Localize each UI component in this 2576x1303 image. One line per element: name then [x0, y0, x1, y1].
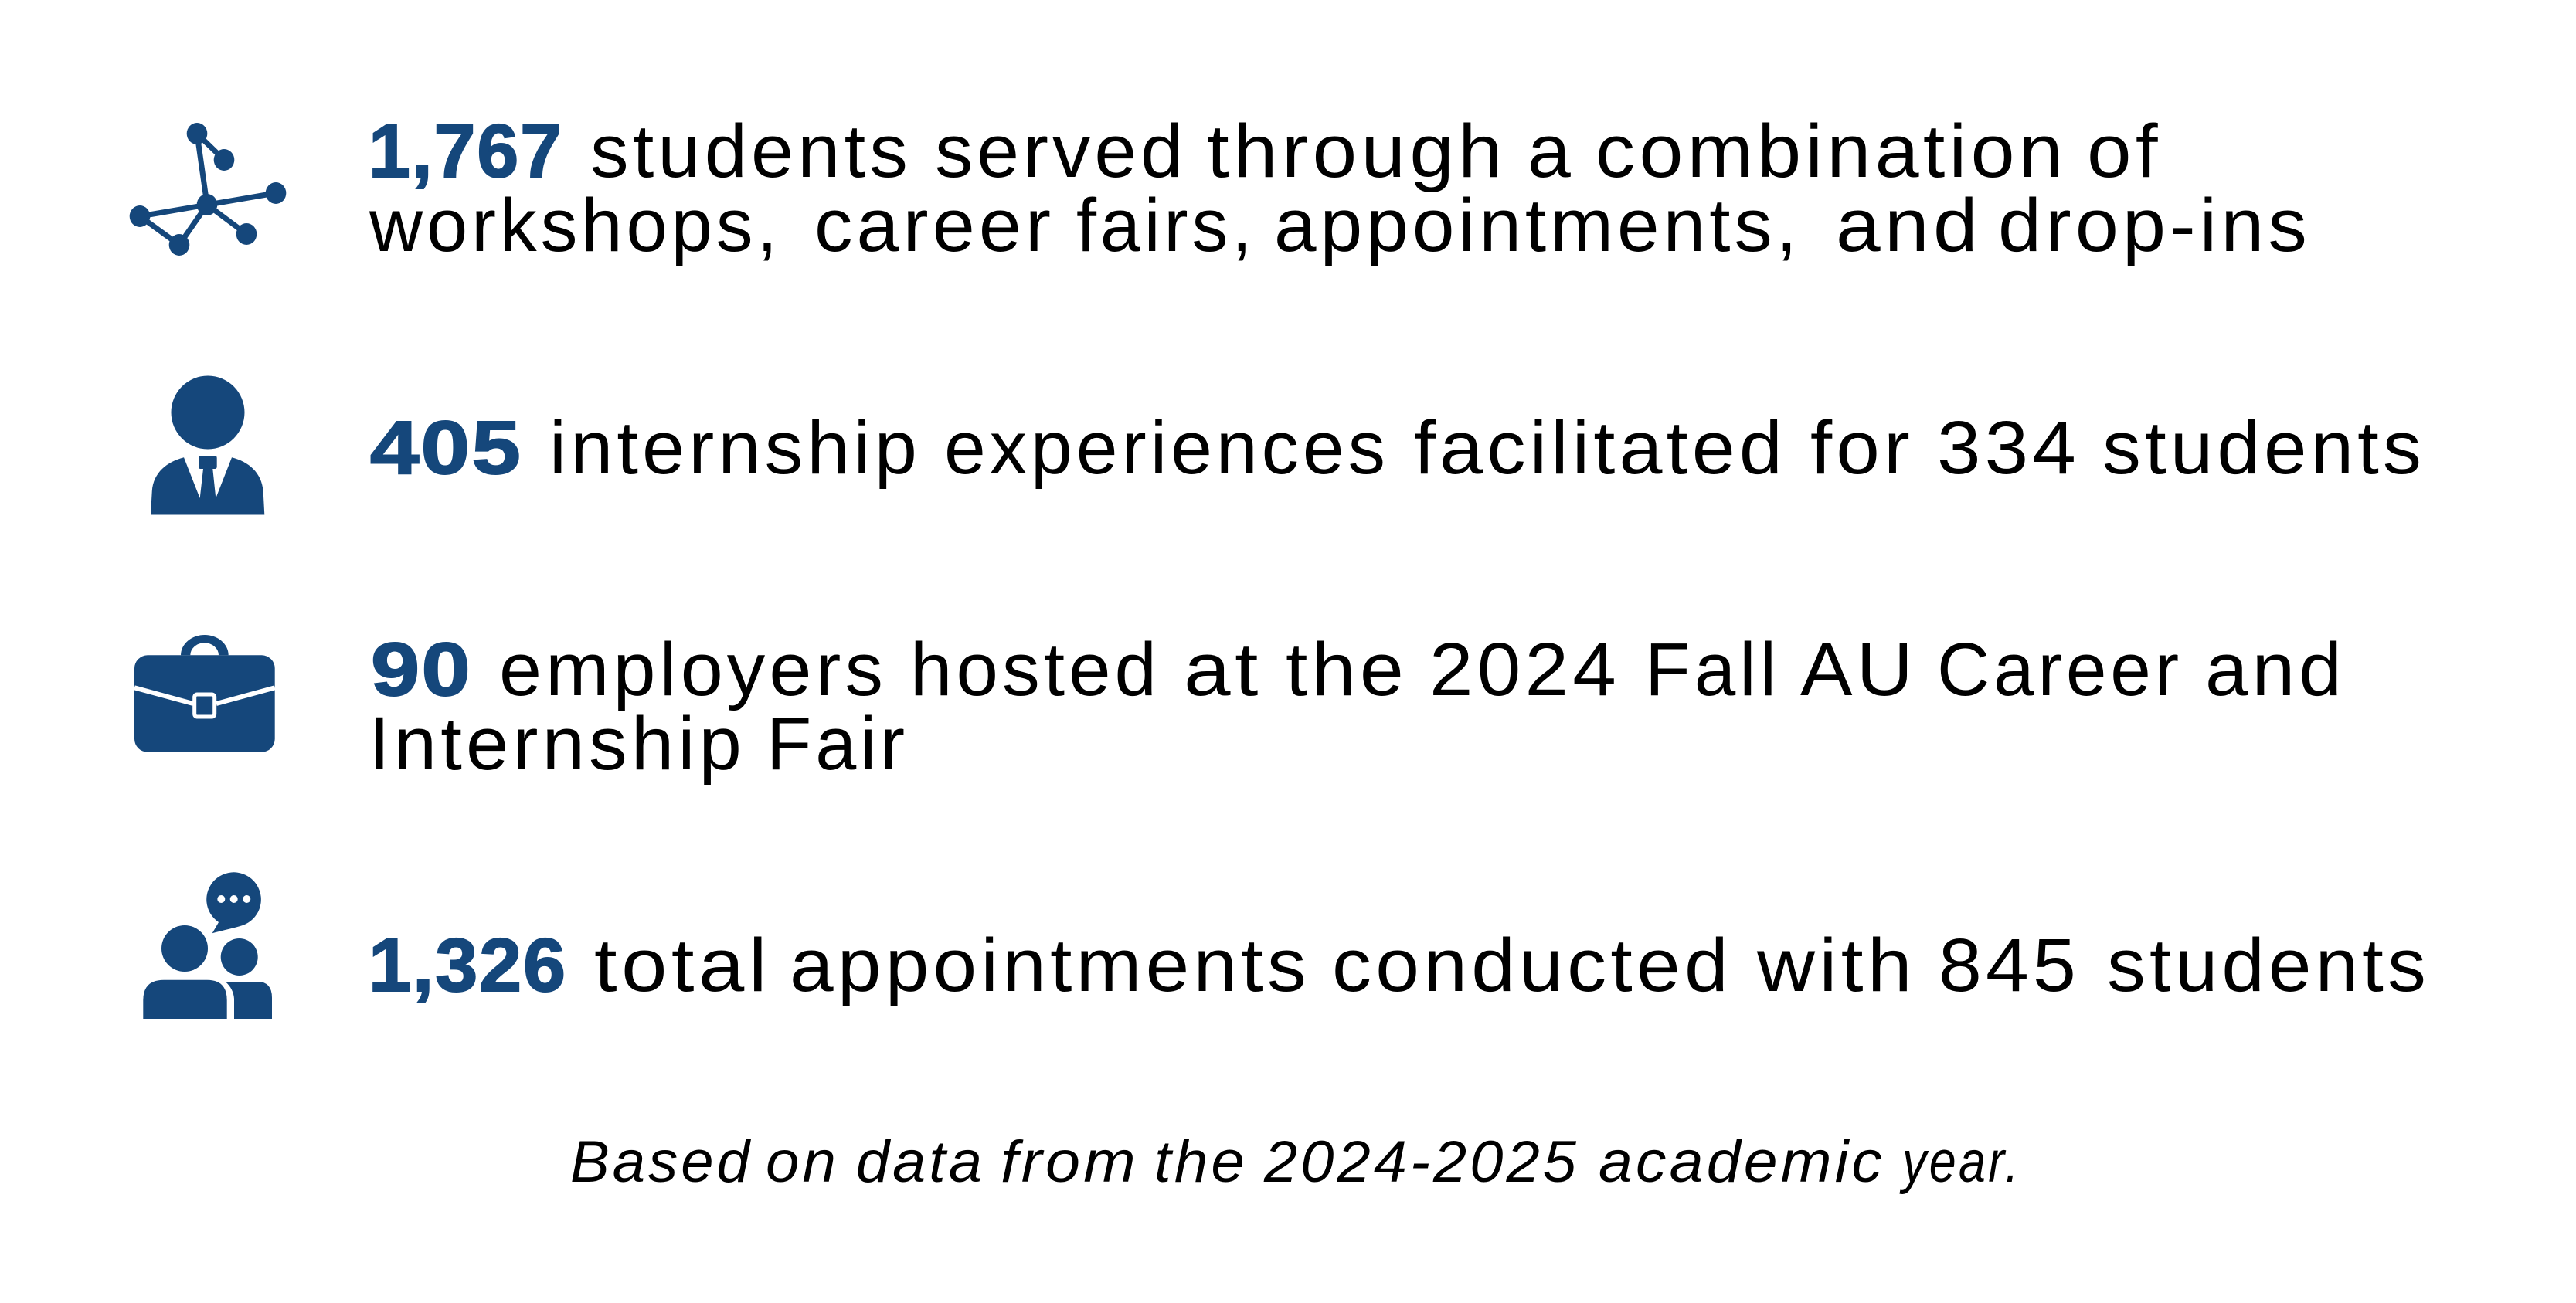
footnote: data	[856, 1129, 985, 1195]
text: 90 employers hosted: Internship	[369, 701, 746, 786]
text: 1,767 students served: drop-ins	[1998, 183, 2311, 267]
text: 405 internship experiences: 334	[1937, 405, 2080, 490]
text: 90 employers hosted: hosted	[910, 627, 1161, 711]
text: 405 internship experiences: for	[1810, 405, 1914, 490]
footnote	[570, 1129, 2021, 1195]
icon: person in suit	[151, 375, 264, 514]
text: 405 internship experiences: experiences	[944, 405, 1389, 490]
footnote: 2024-2025	[1263, 1129, 1579, 1195]
footnote: academic	[1599, 1129, 1885, 1195]
row: internships	[151, 375, 2425, 514]
footnote: from	[1001, 1129, 1139, 1195]
text: 90 employers hosted: employers	[499, 627, 887, 711]
text: 1,767 students served: and	[1836, 183, 1982, 267]
text: 1,767 students served: students	[590, 109, 912, 193]
row: appointments	[143, 872, 2430, 1019]
text: 90 employers hosted: 2024	[1429, 627, 1620, 711]
text: 1,767 students served	[369, 109, 2311, 267]
text: 90 employers hosted: Fall	[1645, 627, 1780, 711]
text: 1,326 total appointments: 1,326	[369, 923, 567, 1007]
footnote: year.	[1899, 1129, 2021, 1195]
text: 90 employers hosted: Fair	[766, 701, 909, 786]
icon: two people with speech bubble	[143, 872, 272, 1019]
text: 1,326 total appointments	[369, 923, 2430, 1007]
text: 1,767 students served: career	[814, 183, 1055, 267]
text: 405 internship experiences: facilitated	[1414, 405, 1786, 490]
text: 1,767 students served: a	[1528, 109, 1575, 193]
text: 1,326 total appointments: total	[594, 923, 771, 1007]
text: 405 internship experiences: 405	[370, 405, 522, 490]
text: 1,767 students served: served	[935, 109, 1187, 193]
text: 90 employers hosted	[369, 627, 2346, 786]
footnote: Based	[570, 1129, 753, 1195]
icon: network nodes	[130, 123, 286, 256]
icon: briefcase	[134, 635, 275, 752]
text: 1,326 total appointments: conducted	[1332, 923, 1732, 1007]
text: 1,767 students served: appointments,	[1274, 183, 1801, 267]
row: students served	[130, 109, 2311, 267]
text: 90 employers hosted: AU	[1800, 627, 1917, 711]
text: 1,767 students served: of	[2087, 109, 2162, 193]
text: 1,326 total appointments: appointments	[790, 923, 1310, 1007]
text: 90 employers hosted: the	[1286, 627, 1408, 711]
text: 1,326 total appointments: with	[1756, 923, 1916, 1007]
text: 1,767 students served: combination	[1596, 109, 2067, 193]
text: 1,767 students served: workshops,	[369, 183, 781, 267]
row: employers	[134, 627, 2346, 786]
text: 1,767 students served: fairs,	[1076, 183, 1256, 267]
text: 1,767 students served: 1,767	[369, 109, 563, 193]
text: 1,326 total appointments: 845	[1939, 923, 2080, 1007]
text: 90 employers hosted: and	[2205, 627, 2346, 711]
text: 90 employers hosted: 90	[371, 627, 472, 711]
text: 405 internship experiences: students	[2102, 405, 2425, 490]
footnote: on	[766, 1129, 839, 1195]
text: 405 internship experiences	[370, 405, 2425, 490]
text: 90 employers hosted: Career	[1937, 627, 2183, 711]
footnote: the	[1154, 1129, 1248, 1195]
text: 1,767 students served: through	[1207, 109, 1507, 193]
text: 405 internship experiences: internship	[549, 405, 921, 490]
text: 90 employers hosted: at	[1184, 627, 1263, 711]
text: 1,326 total appointments: students	[2107, 923, 2430, 1007]
